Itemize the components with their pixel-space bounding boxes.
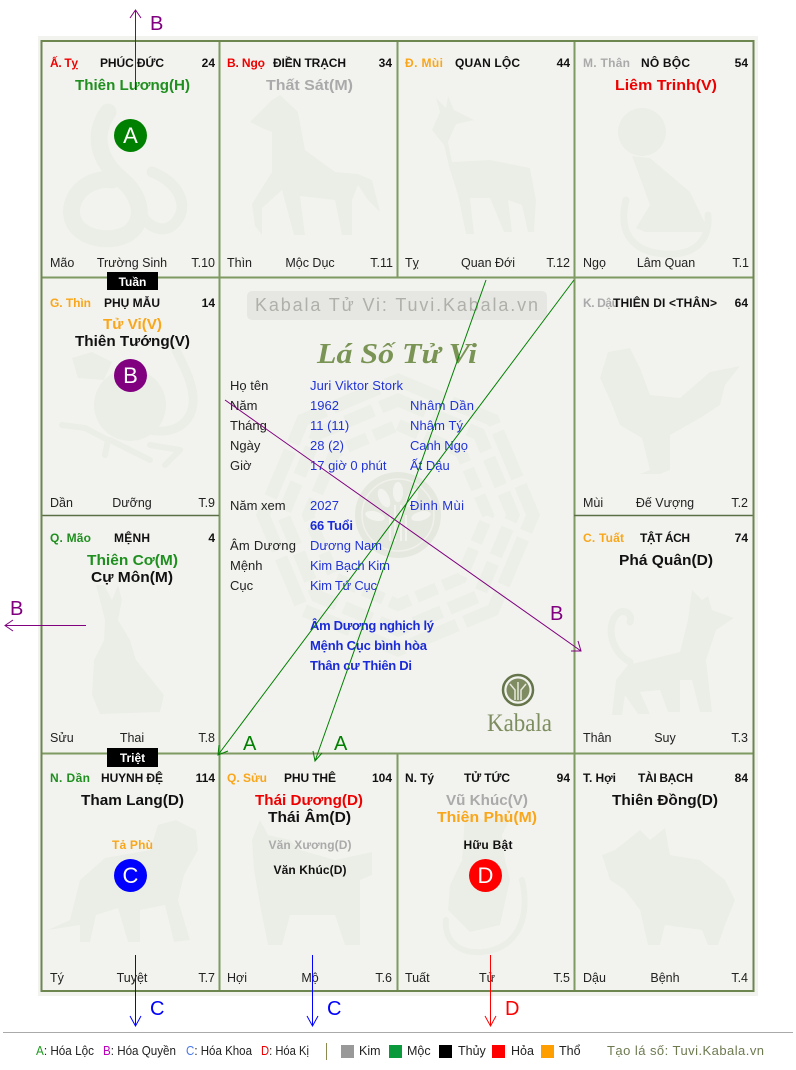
palace: Quan Lộc: Tỵ: [405, 256, 420, 270]
palace: Điền Trạch: T.11: [370, 256, 393, 270]
palace: Phụ Mẫu: T.9: [198, 496, 215, 510]
palace: Phụ Mẫu: Dần: [50, 496, 73, 510]
icon: monkey: [618, 108, 708, 254]
grid lines: [41, 41, 754, 991]
icon: rooster: [600, 348, 740, 474]
legend: ngũ hành: Thủy: [458, 1044, 487, 1058]
center info table: 28 (2): [310, 438, 344, 453]
icon: tiger: [48, 820, 198, 942]
arrow: B diagonal: [225, 400, 581, 651]
center info table: Họ tên: [230, 378, 268, 393]
palace: Mệnh: Thai: [120, 731, 144, 745]
center info table: 66 Tuổi: [310, 518, 353, 533]
panel: center title strip: Kabala Tử Vi: Tuvi.Kabala.vn: [255, 295, 538, 315]
center info table: Tháng: [230, 418, 267, 433]
palace: Mệnh: Thiên Cơ(M): [87, 552, 178, 569]
arrow: D down: D: [505, 998, 519, 1020]
icon: horse: [250, 95, 380, 235]
icon: rat: [446, 815, 525, 952]
center info table: Âm Dương nghịch lý: [310, 618, 435, 633]
legend: site link: Tạo lá số: Tuvi.Kabala.vn: [607, 1043, 764, 1058]
legend: ngũ hành: [341, 1044, 581, 1058]
arrow: A to Huynh Đệ: A: [243, 733, 257, 755]
palace: Nô Bộc: NÔ BỘC: [641, 55, 690, 70]
badge: A: A: [123, 123, 138, 148]
palace: Phu Thê: Văn Xương(D): [268, 838, 352, 852]
palace: Phu Thê: [227, 770, 392, 985]
center info table: Canh Ngọ: [410, 438, 468, 453]
center info table: Ất Dậu: [410, 458, 450, 473]
palace: Tài Bạch: T. Hợi: [583, 771, 616, 785]
palace: Phụ Mẫu: Tử Vi(V): [103, 316, 162, 333]
palace: Quan Lộc: Đ. Mùi: [405, 56, 443, 70]
palace: Điền Trạch: ĐIỀN TRẠCH: [273, 55, 346, 70]
palace: Huynh Đệ: [50, 770, 215, 985]
palace: Thiên Di: Đế Vượng: [636, 496, 694, 510]
icon: ox: [252, 820, 372, 945]
arrow: C down 2: [307, 955, 341, 1026]
icon: dragon: [62, 350, 193, 465]
palace: Huynh Đệ: Tham Lang(D): [81, 792, 184, 809]
palace: Phu Thê: Thái Âm(D): [268, 808, 351, 826]
palace: Phúc Đức: Trường Sinh: [97, 256, 167, 270]
palace: Tài Bạch: Bệnh: [650, 971, 680, 985]
palace: Tật Ách: C. Tuất: [583, 531, 624, 545]
arrow: C down 1: C: [150, 998, 164, 1020]
palace: Tử Tức: TỬ TỨC: [464, 770, 510, 785]
arrow: A to Phu Thê: A: [334, 733, 348, 755]
icon: Kabala logo: Kabala: [487, 710, 552, 737]
legend: tứ hóa: D: Hóa Kị: [261, 1044, 309, 1058]
palace: Phu Thê: Văn Khúc(D): [274, 863, 346, 877]
icon: goat: [432, 96, 536, 234]
center info table: Âm Dương: [230, 538, 296, 553]
palace: Phu Thê: Hợi: [227, 971, 247, 985]
palace: Mệnh: Sửu: [50, 731, 74, 745]
palace: Mệnh: MỆNH: [114, 530, 150, 545]
palace: Phu Thê: Thái Dương(D): [255, 792, 363, 809]
palace: Phụ Mẫu: [50, 295, 215, 510]
palace: Nô Bộc: 54: [735, 56, 748, 70]
palace: Tật Ách: Phá Quân(D): [619, 552, 713, 569]
center info table: Kim Bạch Kim: [310, 558, 390, 573]
palace: Tử Tức: Hữu Bật: [464, 838, 512, 852]
arrow: C down 2: C: [327, 998, 341, 1020]
icon: snake: [71, 112, 182, 239]
palace: Mệnh: Q. Mão: [50, 531, 91, 545]
palace: Điền Trạch: Thìn: [227, 256, 252, 270]
center info table: Năm xem: [230, 498, 286, 513]
badge: D: [469, 859, 502, 892]
icon: Kabala logo: [487, 675, 552, 737]
palace: Phu Thê: T.6: [375, 971, 392, 985]
palace: Nô Bộc: Ngọ: [583, 256, 606, 270]
arrow: B up: [130, 10, 163, 90]
palace: Tật Ách: TẬT ÁCH: [640, 530, 690, 545]
palace: Tật Ách: Thân: [583, 731, 612, 745]
center info table: 1962: [310, 398, 339, 413]
center info table: Đinh Mùi: [410, 498, 464, 513]
palace: Tài Bạch: [583, 770, 748, 985]
center info table: Kim Tứ Cục: [310, 578, 378, 593]
legend: tứ hóa: A: Hóa Lộc: [36, 1044, 94, 1058]
palace: Phúc Đức: Thiên Lương(H): [75, 77, 190, 94]
palace: Huynh Đệ: 114: [196, 771, 215, 785]
center info table: Cục: [230, 578, 254, 593]
badge: Triệt: Triệt: [120, 751, 145, 765]
icon: dog: [611, 590, 734, 715]
palace: Phúc Đức: [50, 55, 215, 270]
panel: center title strip: [247, 291, 547, 320]
arrow: D down: [485, 955, 519, 1026]
arrow: B left: B: [10, 598, 23, 620]
zodiac watermarks: [48, 95, 740, 952]
palace: Nô Bộc: [583, 55, 749, 270]
palace: Tài Bạch: Dậu: [583, 971, 606, 985]
badge: A: [114, 119, 147, 152]
palace: Nô Bộc: M. Thân: [583, 56, 630, 70]
palace: Nô Bộc: Lâm Quan: [637, 256, 695, 270]
badge: D: D: [478, 863, 493, 888]
arrow: A to Huynh Đệ: [218, 280, 574, 755]
palace: Phúc Đức: T.10: [191, 256, 215, 270]
icon: rabbit: [92, 585, 164, 714]
palace: Huynh Đệ: Tuyệt: [117, 971, 148, 985]
badge: B: [114, 359, 147, 392]
palace: Tài Bạch: Thiên Đồng(D): [612, 792, 718, 809]
legend: ngũ hành: Thổ: [559, 1044, 581, 1058]
palace: Phu Thê: Mộ: [301, 971, 319, 985]
legend: tứ hóa: C: Hóa Khoa: [186, 1044, 252, 1058]
palace: Phụ Mẫu: Thiên Tướng(V): [75, 333, 190, 350]
badge: B: B: [123, 363, 138, 388]
palace: Quan Lộc: T.12: [546, 256, 570, 270]
palace: Điền Trạch: 34: [379, 56, 392, 70]
palace: Phúc Đức: 24: [202, 56, 215, 70]
palace: Tử Tức: Thiên Phủ(M): [437, 809, 537, 826]
palace: Thiên Di: THIÊN DI <THÂN>: [613, 295, 717, 310]
center info table: Nhâm Dần: [410, 398, 474, 413]
badge: Triệt: [107, 748, 158, 767]
palace: Tật Ách: T.3: [731, 731, 748, 745]
palace: Mệnh: T.8: [198, 731, 215, 745]
palace: Nô Bộc: Liêm Trinh(V): [615, 77, 717, 94]
palace: Huynh Đệ: N. Dần: [50, 771, 90, 785]
palace: Điền Trạch: Thất Sát(M): [266, 77, 353, 94]
icon: pig: [602, 828, 735, 945]
palace: Tử Tức: Tử: [479, 971, 495, 985]
palace: Quan Lộc: [405, 55, 570, 270]
palace: Thiên Di: T.2: [731, 496, 748, 510]
palace: Tài Bạch: TÀI BẠCH: [638, 770, 693, 785]
palace: Thiên Di: Mùi: [583, 496, 603, 510]
center info table: Thân cư Thiên Di: [310, 658, 412, 673]
palace: Quan Lộc: QUAN LỘC: [455, 55, 520, 70]
palace: Phụ Mẫu: G. Thìn: [50, 296, 91, 310]
palace: Phụ Mẫu: Dưỡng: [112, 496, 152, 510]
palace: Huynh Đệ: Tả Phù: [112, 838, 153, 852]
palace: Phu Thê: PHU THÊ: [284, 770, 336, 785]
badge: C: C: [123, 863, 139, 888]
center info table: 17 giờ 0 phút: [310, 458, 387, 473]
palace: Tử Tức: [405, 770, 570, 985]
palace: Quan Lộc: Quan Đới: [461, 256, 515, 270]
legend: [3, 1032, 793, 1060]
center info table: Juri Viktor Stork: [310, 378, 404, 393]
palace: Phúc Đức: Mão: [50, 256, 74, 270]
palace: Điền Trạch: [227, 55, 393, 270]
palace: Điền Trạch: Mộc Dục: [285, 256, 335, 270]
title: Lá Số Tử Vi: [316, 338, 477, 370]
palace: Phu Thê: 104: [372, 771, 392, 785]
palace: Nô Bộc: T.1: [732, 256, 749, 270]
palace: Tật Ách: Suy: [654, 731, 677, 745]
palace: Tử Tức: Tuất: [405, 971, 430, 985]
palace: Tử Tức: Vũ Khúc(V): [446, 792, 528, 809]
bagua watermark: [263, 380, 533, 650]
badge: Tuần: Tuần: [119, 275, 146, 289]
palace: Huynh Đệ: HUYNH ĐỆ: [101, 770, 163, 785]
palace: Phúc Đức: PHÚC ĐỨC: [100, 55, 164, 70]
palace: Tài Bạch: T.4: [731, 971, 748, 985]
palace: Tài Bạch: 84: [735, 771, 748, 785]
center info table: Nhâm Tý: [410, 418, 464, 433]
palace: Quan Lộc: 44: [557, 56, 570, 70]
palace: Huynh Đệ: Tý: [50, 971, 65, 985]
palace: Phu Thê: Q. Sửu: [227, 771, 267, 785]
legend: ngũ hành: Hỏa: [511, 1044, 534, 1058]
palace: Tử Tức: T.5: [553, 971, 570, 985]
palace: Mệnh: [50, 530, 215, 745]
arrow: B diagonal: B: [550, 603, 563, 625]
palace: Thiên Di: [583, 295, 748, 510]
palace: Tật Ách: [583, 530, 748, 745]
center info table: Giờ: [230, 458, 252, 473]
arrow: A to Phu Thê: [313, 280, 486, 761]
center info table: Ngày: [230, 438, 261, 453]
arrow: B up: B: [150, 13, 163, 35]
center info table: Năm: [230, 398, 257, 413]
center info table: Dương Nam: [310, 538, 382, 553]
badge: C: [114, 859, 147, 892]
legend: tứ hóa: [36, 1044, 309, 1058]
palace: Phúc Đức: Ấ. Tỵ: [50, 55, 78, 70]
palace: Thiên Di: 64: [735, 296, 748, 310]
badge: Tuần: [107, 272, 158, 290]
arrow: C down 1: [130, 955, 164, 1026]
palace: Phụ Mẫu: PHỤ MẪU: [104, 295, 160, 310]
palace: Thiên Di: K. Dậu: [583, 296, 619, 310]
palace: Tử Tức: N. Tý: [405, 771, 434, 785]
legend: tứ hóa: B: Hóa Quyền: [103, 1044, 176, 1058]
palace: Mệnh: Cự Môn(M): [91, 569, 173, 586]
palace: Mệnh: 4: [208, 531, 215, 545]
palace: Tật Ách: 74: [735, 531, 748, 545]
palace: Huynh Đệ: T.7: [198, 971, 215, 985]
center info table: [230, 378, 474, 673]
center info table: Mệnh Cục bình hòa: [310, 638, 428, 653]
palace: Phụ Mẫu: 14: [202, 296, 215, 310]
legend: ngũ hành: Mộc: [407, 1044, 431, 1058]
center info table: 11 (11): [310, 418, 349, 433]
legend: ngũ hành: Kim: [359, 1044, 381, 1058]
center info table: 2027: [310, 498, 339, 513]
palace: Điền Trạch: B. Ngọ: [227, 56, 265, 70]
center info table: Mệnh: [230, 558, 263, 573]
arrow: B left: [5, 598, 86, 631]
palace: Tử Tức: 94: [557, 771, 570, 785]
